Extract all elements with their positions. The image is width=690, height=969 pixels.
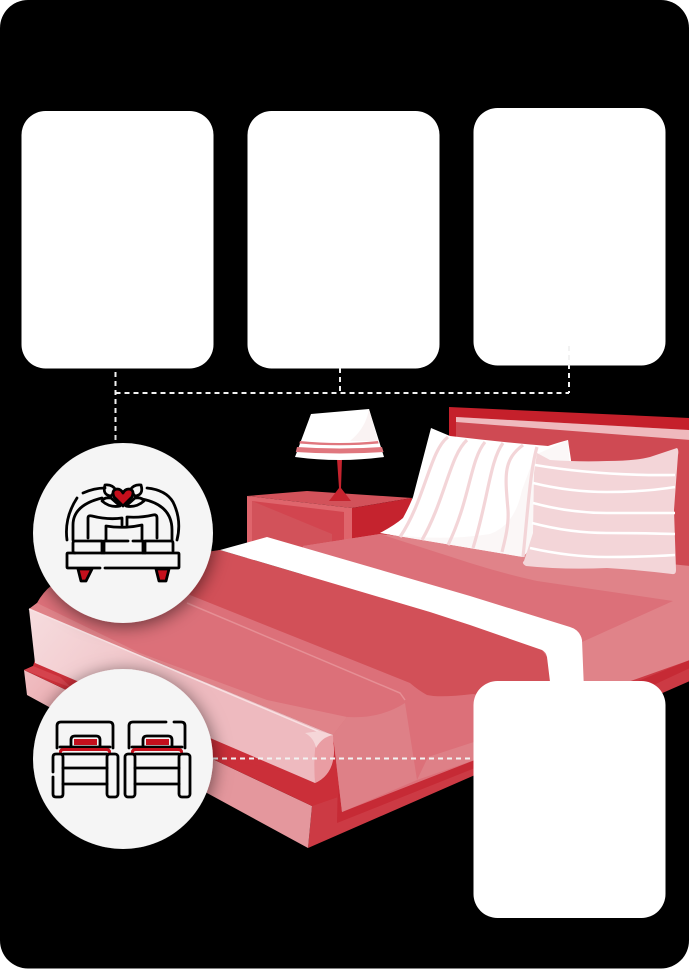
headboard: [449, 407, 690, 575]
circle badge: double bed: [33, 443, 213, 623]
card 4: [474, 681, 666, 918]
duvet dark upper panel: [189, 550, 550, 696]
dashed connector lines: [116, 346, 569, 758]
circle badge: twin beds: [33, 669, 213, 849]
duvet right fold: [333, 703, 417, 812]
card 3: [474, 108, 666, 366]
right bed: [125, 722, 190, 797]
icon: heart: [113, 489, 133, 506]
white sheet band: [220, 537, 584, 690]
bed scene illustration: [24, 407, 690, 848]
nightstand: [247, 491, 412, 560]
duvet body: [29, 550, 552, 812]
icon: romantic double bed: [66, 485, 179, 581]
duvet front edge strip: [29, 603, 347, 735]
bed platform: [24, 660, 690, 848]
duvet hanging side: [29, 609, 334, 783]
mattress sheet top: [302, 534, 689, 681]
white striped pillow: [380, 428, 572, 557]
icon: twin beds: [53, 722, 190, 797]
pink striped pillow: [523, 448, 678, 574]
fold highlight: [187, 603, 405, 700]
card 1: [22, 111, 214, 368]
card 2: [248, 111, 440, 368]
table lamp: [295, 409, 384, 501]
left bed: [53, 722, 118, 797]
